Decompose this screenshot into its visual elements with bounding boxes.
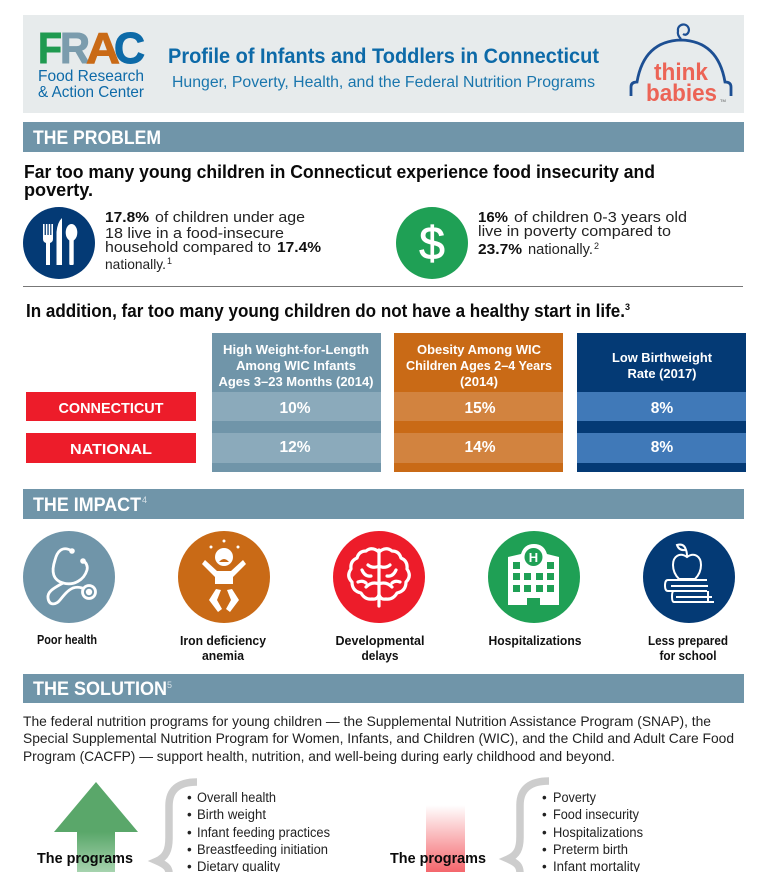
arrow up: programs improve bbox=[37, 782, 138, 872]
label: poor health: Poor health bbox=[37, 633, 97, 647]
banner title: Profile of Infants and Toddlers in Connecticut bbox=[168, 45, 599, 68]
list: improved outcomes: Overall health bbox=[197, 790, 276, 805]
label: developmental delays bbox=[336, 634, 424, 663]
list: reduced outcomes: Food insecurity bbox=[553, 807, 639, 822]
icon: hospital bbox=[488, 531, 580, 623]
stat: poverty: live in poverty compared to bbox=[478, 223, 671, 240]
column: obesity: 15% bbox=[464, 400, 496, 417]
column: high weight-for-length: Ages 3–23 Months (2014) bbox=[218, 374, 374, 389]
label: developmental delays: delays bbox=[362, 649, 399, 663]
column: obesity: 14% bbox=[464, 439, 496, 456]
section bar: the solution bbox=[23, 674, 744, 703]
footnote 3: 3 bbox=[625, 302, 630, 312]
column: low birthweight: Rate (2017) bbox=[628, 366, 696, 381]
icon: fork, knife and spoon bbox=[23, 207, 95, 279]
stat: food insecurity: household compared to bbox=[105, 239, 271, 256]
label: the programs: The programs bbox=[390, 850, 486, 867]
row label: Connecticut: CONNECTICUT bbox=[58, 400, 164, 417]
impact labels bbox=[37, 633, 728, 663]
column: obesity: Obesity Among WIC bbox=[417, 342, 542, 357]
Think Babies logo: think bbox=[654, 59, 709, 86]
icon: dollar sign: $ bbox=[419, 217, 445, 269]
icon: crying baby bbox=[178, 531, 270, 623]
section bar: the impact: THE IMPACT bbox=[33, 495, 141, 516]
label: iron deficiency anemia bbox=[180, 634, 266, 663]
header banner bbox=[23, 15, 744, 113]
section bar: the solution: 5 bbox=[167, 680, 172, 690]
stat: food insecurity: 18 live in a food-insecure bbox=[105, 225, 284, 242]
Think Babies logo: TM bbox=[720, 98, 726, 103]
FRAC logo: F bbox=[38, 24, 62, 73]
icon: apple on books bbox=[643, 531, 735, 623]
list: reduced outcomes: Poverty bbox=[553, 790, 596, 805]
column: high weight-for-length bbox=[212, 333, 381, 472]
label: the programs: The programs bbox=[37, 850, 133, 867]
label: iron deficiency anemia: Iron deficiency bbox=[180, 634, 266, 648]
list: improved outcomes: • bbox=[187, 825, 192, 840]
list: improved outcomes: Breastfeeding initiation bbox=[197, 842, 328, 857]
problem heading: poverty. bbox=[24, 180, 93, 200]
banner subtitle: Hunger, Poverty, Health, and the Federal Nutrition Programs bbox=[172, 74, 595, 91]
list: improved outcomes: • bbox=[187, 790, 192, 805]
icon: dollar sign bbox=[396, 207, 468, 279]
label: iron deficiency anemia: anemia bbox=[202, 649, 245, 663]
label: less prepared for school: Less prepared bbox=[648, 634, 728, 648]
stat: food insecurity: 1 bbox=[167, 256, 172, 266]
list: improved outcomes: Infant feeding practices bbox=[197, 825, 330, 840]
stat: poverty: 16% bbox=[478, 209, 508, 226]
column: low birthweight: 8% bbox=[651, 439, 673, 456]
row label: National bbox=[26, 433, 196, 463]
label: less prepared for school bbox=[648, 634, 728, 663]
Think Babies logo bbox=[631, 24, 731, 107]
problem heading: Far too many young children in Connecticut experience food insecurity and bbox=[24, 162, 655, 182]
column: obesity: Children Ages 2–4 Years bbox=[406, 358, 552, 373]
stat: poverty: of children 0-3 years old bbox=[514, 209, 687, 226]
list: reduced outcomes: Hospitalizations bbox=[553, 825, 643, 840]
stat: poverty: 2 bbox=[594, 241, 599, 251]
column: low birthweight: 8% bbox=[651, 400, 673, 417]
FRAC logo: A bbox=[86, 24, 120, 73]
section bar: the problem bbox=[23, 122, 744, 152]
column: high weight-for-length: High Weight-for-Length bbox=[223, 342, 369, 357]
column: high weight-for-length: Among WIC Infants bbox=[236, 358, 356, 373]
row label: Connecticut bbox=[26, 392, 196, 421]
FRAC logo: R bbox=[60, 24, 90, 73]
brace: improve list bbox=[157, 782, 197, 872]
list: improved outcomes: Birth weight bbox=[197, 807, 266, 822]
list: reduced outcomes: • bbox=[542, 790, 547, 805]
brace: reduce list bbox=[508, 781, 549, 872]
list: reduced outcomes: • bbox=[542, 825, 547, 840]
section bar: the impact: 4 bbox=[142, 495, 147, 505]
stat: food insecurity: 17.8% bbox=[105, 209, 149, 226]
list: reduced outcomes: Preterm birth bbox=[553, 842, 628, 857]
section bar: the solution: THE SOLUTION bbox=[33, 679, 167, 700]
solution paragraph: The federal nutrition programs for young children — the Supplemental Nutrition Assistance Program (SNAP), the bbox=[23, 713, 711, 729]
list: improved outcomes: • bbox=[187, 842, 192, 857]
column: low birthweight: Low Birthweight bbox=[612, 350, 713, 365]
arrow down: programs reduce bbox=[390, 805, 486, 872]
stat: poverty: 23.7% bbox=[478, 241, 522, 258]
list: reduced outcomes: • bbox=[542, 842, 547, 857]
list: reduced outcomes: • bbox=[542, 807, 547, 822]
section bar: the problem: THE PROBLEM bbox=[33, 128, 161, 149]
label: hospitalizations: Hospitalizations bbox=[488, 634, 582, 648]
solution paragraph: Program (CACFP) — support health, nutrition, and well-being during early childhood and beyond. bbox=[23, 748, 615, 764]
FRAC logo: Food Research bbox=[38, 68, 144, 85]
stat: food insecurity: 17.4% bbox=[277, 239, 321, 256]
table bbox=[26, 333, 746, 472]
icon: hospital: H bbox=[529, 550, 538, 565]
icon: brain bbox=[333, 531, 425, 623]
list: improved outcomes: • bbox=[187, 807, 192, 822]
label: less prepared for school: for school bbox=[660, 649, 716, 663]
row label: National: NATIONAL bbox=[70, 441, 152, 458]
column: obesity: (2014) bbox=[460, 374, 498, 389]
column: obesity bbox=[394, 333, 563, 472]
column: low birthweight bbox=[577, 333, 746, 472]
FRAC logo: & Action Center bbox=[38, 84, 145, 101]
label: developmental delays: Developmental bbox=[336, 634, 424, 648]
stat: food insecurity: of children under age bbox=[155, 209, 305, 226]
section bar: the impact bbox=[23, 489, 744, 519]
stat: food insecurity: nationally. bbox=[105, 256, 166, 272]
column: high weight-for-length: 10% bbox=[279, 400, 311, 417]
solution paragraph: Special Supplemental Nutrition Program for Women, Infants, and Children (WIC), and the Child and Adult Care Food bbox=[23, 730, 734, 746]
stat: poverty: nationally. bbox=[528, 241, 593, 258]
icon: stethoscope bbox=[23, 531, 115, 623]
FRAC logo bbox=[38, 24, 145, 101]
column: high weight-for-length: 12% bbox=[279, 439, 311, 456]
Think Babies logo: babies bbox=[646, 80, 717, 107]
healthy start heading: In addition, far too many young children do not have a healthy start in life. bbox=[26, 300, 625, 321]
FRAC logo: C bbox=[114, 24, 145, 73]
